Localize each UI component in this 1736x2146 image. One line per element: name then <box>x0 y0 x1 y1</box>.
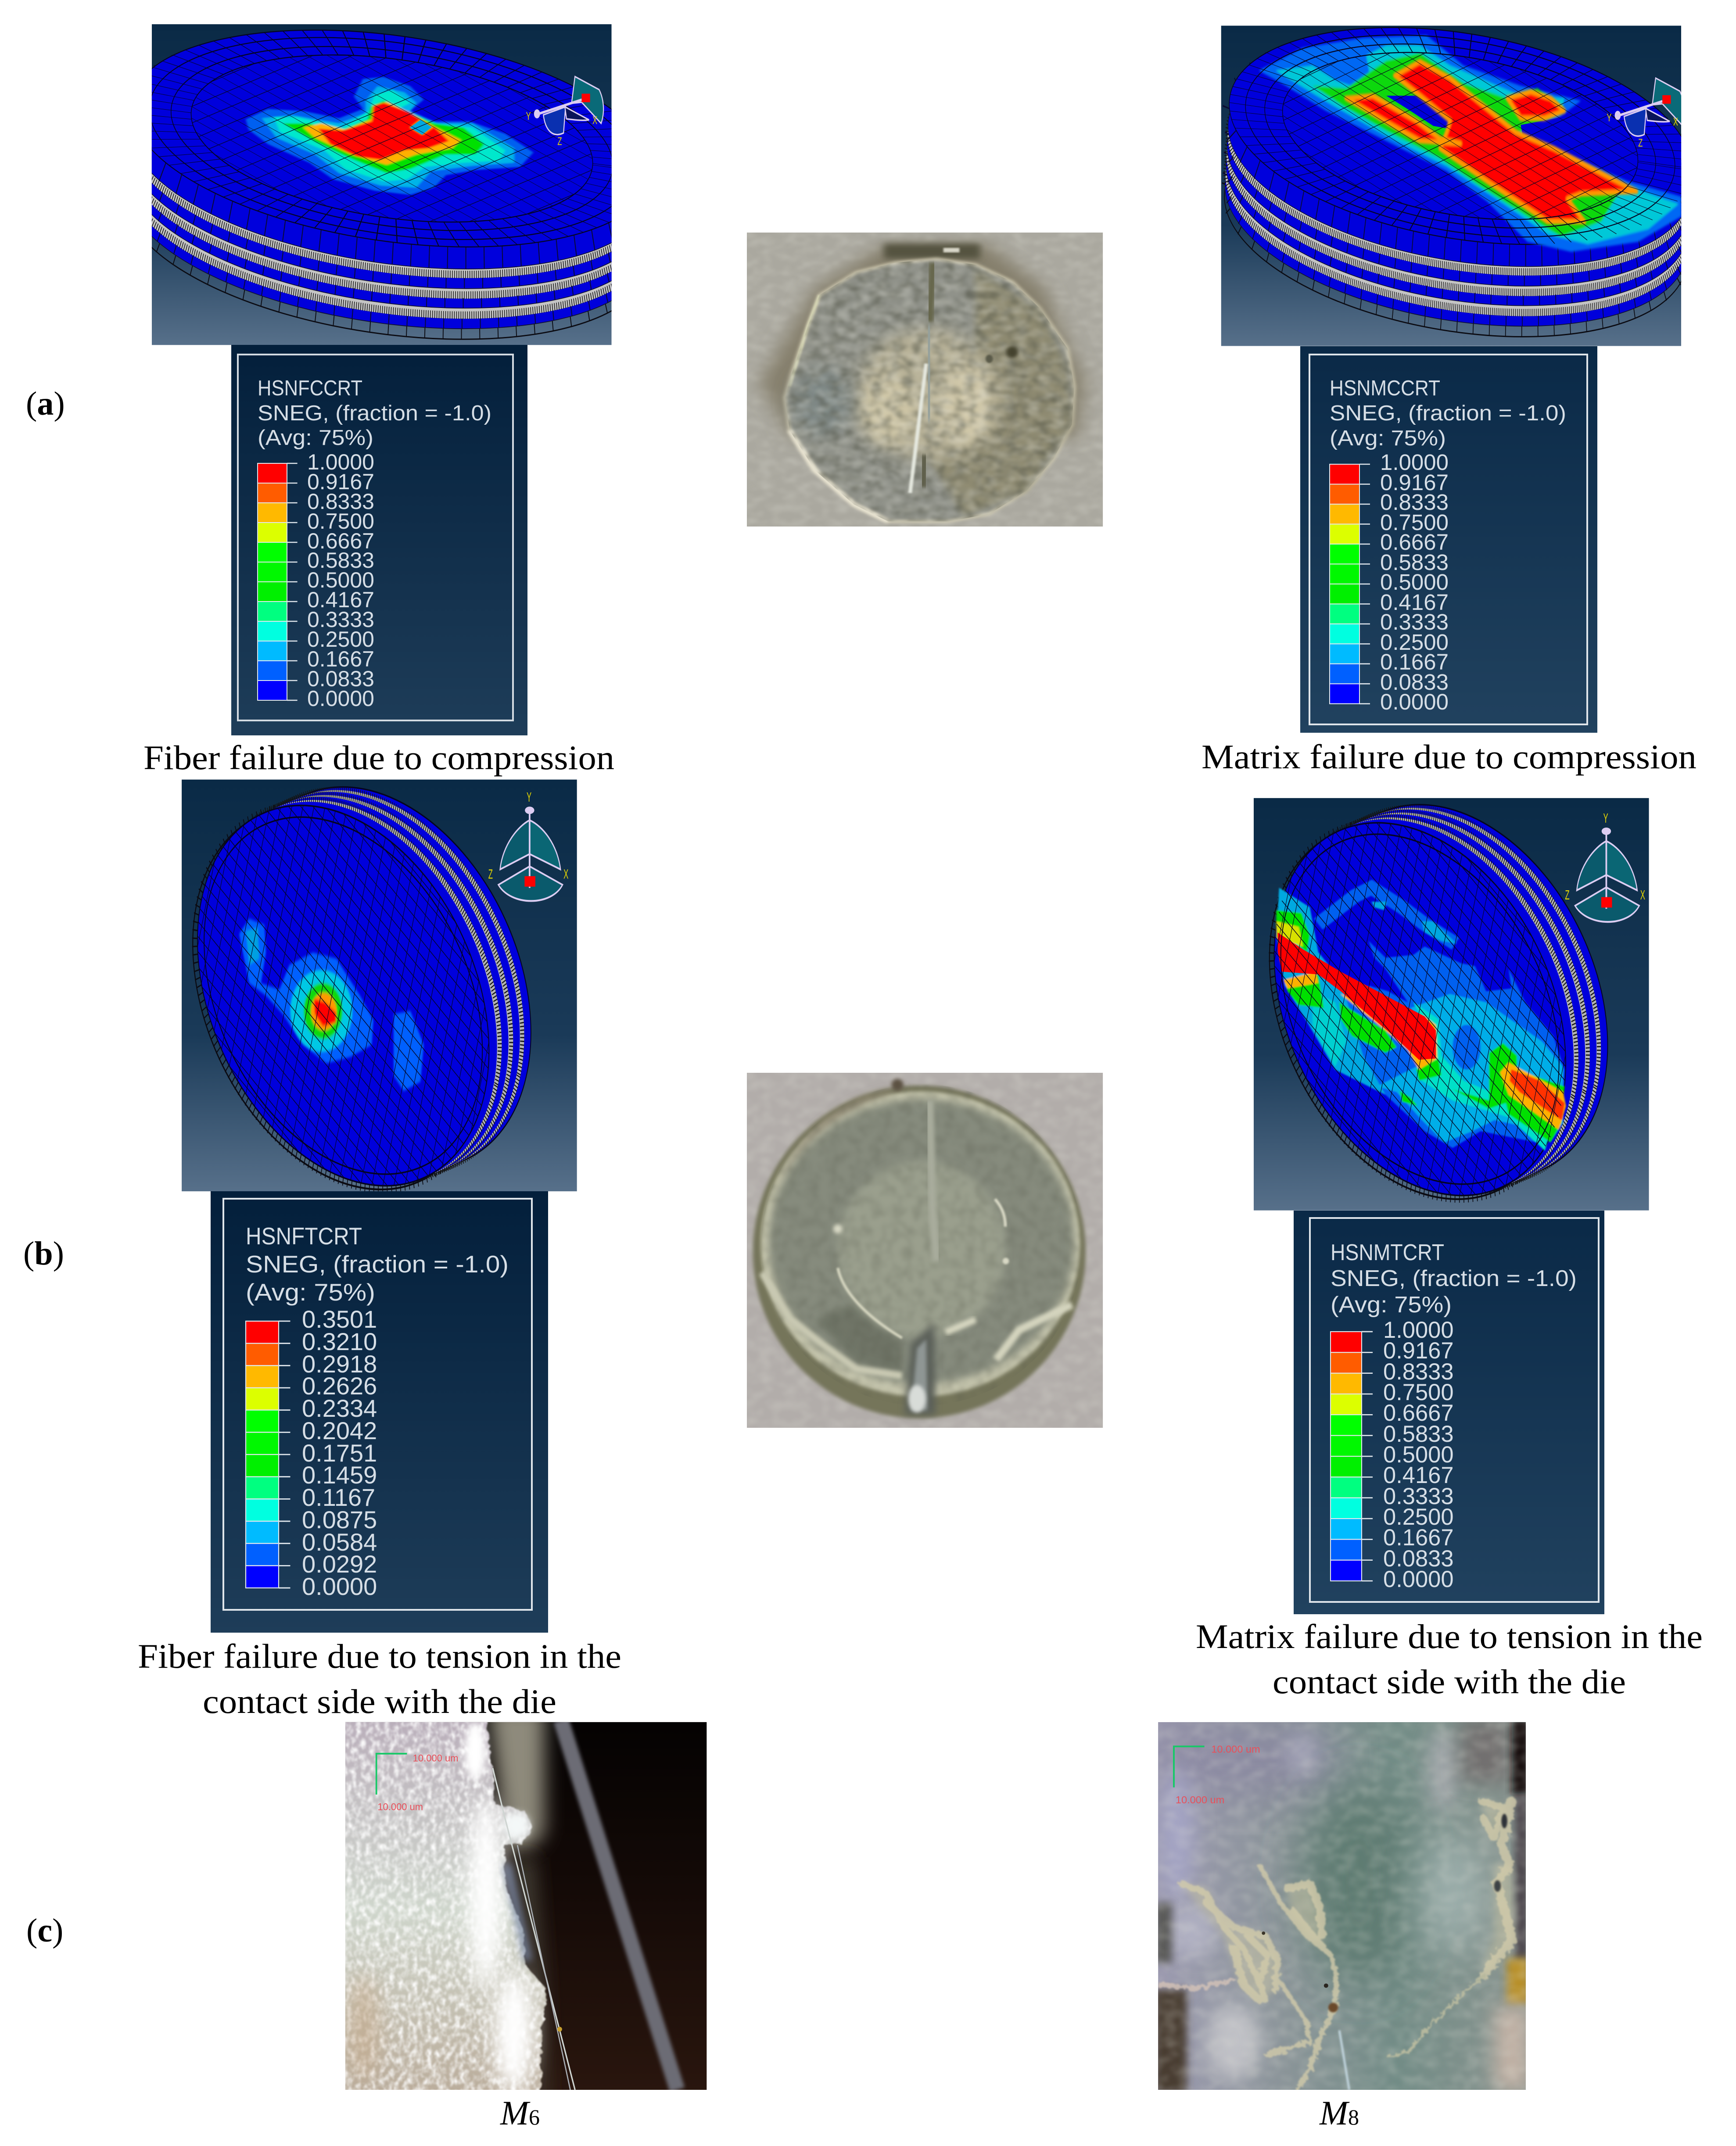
panel: legend HSNMCCRT: 0.7500 <box>1380 510 1449 535</box>
panel: legend HSNFCCRT: HSNFCCRT <box>258 376 362 400</box>
panel: legend HSNMCCRT: 0.5833 <box>1380 550 1449 575</box>
panel: legend HSNMTCRT: 0.0833 <box>1383 1546 1454 1572</box>
panel: legend HSNMTCRT: 0.7500 <box>1383 1379 1454 1405</box>
panel: legend HSNFTCRT <box>211 1191 548 1633</box>
scale bar annotation: 10.000 um <box>1211 1744 1260 1755</box>
scale bar annotation <box>377 1752 458 1813</box>
panel: legend HSNFTCRT: 0.2626 <box>302 1372 377 1400</box>
panel: legend HSNFCCRT: 0.5833 <box>307 548 374 573</box>
photo: specimen after tension <box>746 1071 1106 1430</box>
caption: M6: M6 <box>500 2094 540 2132</box>
panel: legend HSNMTCRT <box>1294 1211 1604 1614</box>
panel: legend HSNMCCRT: 0.5000 <box>1380 570 1449 595</box>
caption: matrix failure due to tension: contact side with the die <box>1273 1662 1626 1701</box>
photo: specimen after compression <box>746 230 1106 529</box>
heat map: fiber compression damage <box>246 77 534 195</box>
panel: legend HSNMCCRT: HSNMCCRT <box>1330 376 1440 400</box>
scale bar annotation <box>1174 1744 1260 1806</box>
icon: axis triad <box>1607 78 1684 149</box>
panel: legend HSNFTCRT: 0.0000 <box>302 1573 377 1600</box>
panel: legend HSNMTCRT: 0.4167 <box>1383 1462 1454 1488</box>
panel: legend HSNFCCRT: 0.6667 <box>307 529 374 553</box>
panel: matrix failure due to compression, contour plot <box>1219 0 1697 365</box>
panel: legend HSNFCCRT: 0.5000 <box>307 568 374 592</box>
scale bar annotation: 10.000 um <box>413 1752 458 1763</box>
icon: axis triad <box>526 76 603 148</box>
panel: legend HSNFCCRT: 0.0833 <box>307 666 374 691</box>
panel: legend HSNMTCRT: (Avg: 75%) <box>1331 1292 1452 1318</box>
panel: legend HSNMCCRT: 0.8333 <box>1380 490 1449 515</box>
icon: axis triad <box>488 790 569 901</box>
panel: legend HSNFTCRT: 0.3210 <box>302 1328 377 1355</box>
row b label: (b) <box>23 1235 64 1272</box>
caption: M8: M8 <box>1319 2094 1359 2132</box>
panel: legend HSNFTCRT: 0.2042 <box>302 1417 377 1444</box>
panel: legend HSNMCCRT: 0.2500 <box>1380 630 1449 655</box>
panel: legend HSNFTCRT: (Avg: 75%) <box>246 1279 375 1306</box>
panel: legend HSNMCCRT: 0.9167 <box>1380 470 1449 495</box>
panel: legend HSNFTCRT: 0.0584 <box>302 1528 377 1556</box>
panel: legend HSNMCCRT: 0.6667 <box>1380 530 1449 555</box>
panel: legend HSNMTCRT: 0.1667 <box>1383 1525 1454 1551</box>
panel: legend HSNMTCRT: HSNMTCRT <box>1331 1240 1444 1265</box>
panel: matrix failure due to tension, contour plot <box>1241 737 1649 1267</box>
panel: legend HSNFTCRT: 0.1751 <box>302 1439 377 1467</box>
panel: fiber failure due to compression, contour plot <box>152 24 612 345</box>
scale bar annotation: 10.000 um <box>1176 1794 1224 1806</box>
panel: legend HSNFTCRT: 0.1167 <box>302 1483 375 1511</box>
photo: micrograph M8 <box>1155 1720 1529 2093</box>
panel: legend HSNFTCRT: SNEG, (fraction = -1.0) <box>246 1250 509 1278</box>
panel: legend HSNFCCRT: 0.7500 <box>307 509 374 534</box>
icon: axis triad <box>1565 811 1645 922</box>
panel: legend HSNFCCRT: 1.0000 <box>307 450 374 474</box>
fiber strands <box>1159 1802 1512 2090</box>
panel: legend HSNFTCRT: 0.0875 <box>302 1506 377 1533</box>
panel: legend HSNMCCRT: (Avg: 75%) <box>1330 426 1446 450</box>
panel: legend HSNFTCRT: 0.0292 <box>302 1550 377 1578</box>
caption: fiber failure due to tension: contact side with the die <box>203 1682 556 1720</box>
panel: legend HSNMTCRT: 0.2500 <box>1383 1504 1454 1530</box>
heat map: matrix compression damage <box>1259 35 1681 252</box>
fiber clumps underlay <box>1182 1802 1514 2002</box>
panel: legend HSNMCCRT: 0.4167 <box>1380 590 1449 615</box>
panel: legend HSNFCCRT: (Avg: 75%) <box>258 426 373 450</box>
panel: legend HSNMTCRT: 0.5833 <box>1383 1421 1454 1447</box>
heat map: matrix tension damage <box>1276 888 1566 1151</box>
panel: legend HSNFCCRT: 0.1667 <box>307 647 374 671</box>
panel: legend HSNMTCRT: 0.9167 <box>1383 1338 1454 1364</box>
panel: legend HSNMCCRT: 0.0833 <box>1380 670 1449 695</box>
panel: legend HSNFCCRT <box>231 345 527 735</box>
panel: legend HSNFCCRT: 0.9167 <box>307 469 374 494</box>
caption: fiber failure due to compression: Fiber failure due to compression <box>143 738 614 777</box>
panel: legend HSNFCCRT: 0.8333 <box>307 489 374 514</box>
panel: legend HSNMCCRT <box>1300 346 1597 733</box>
panel: legend HSNFTCRT: 0.3501 <box>302 1305 377 1333</box>
panel: legend HSNFCCRT: SNEG, (fraction = -1.0) <box>258 401 491 425</box>
panel: legend HSNMCCRT: 0.0000 <box>1380 689 1449 714</box>
panel: legend HSNFCCRT: 0.0000 <box>307 686 374 711</box>
caption: matrix failure due to tension <box>1196 1617 1703 1701</box>
panel: legend HSNMTCRT: SNEG, (fraction = -1.0) <box>1331 1266 1577 1291</box>
panel: legend HSNFCCRT: 0.2500 <box>307 627 374 652</box>
panel: legend HSNFTCRT: 0.1459 <box>302 1461 377 1489</box>
row a label: (a) <box>26 385 65 422</box>
panel: legend HSNMTCRT: 0.6667 <box>1383 1400 1454 1426</box>
panel: legend HSNFCCRT: 0.4167 <box>307 588 374 612</box>
panel: legend HSNMTCRT: 0.8333 <box>1383 1359 1454 1385</box>
caption: matrix failure due to compression: Matrix failure due to compression <box>1202 738 1697 776</box>
scale bar annotation: 10.000 um <box>377 1801 423 1813</box>
panel: legend HSNFTCRT: 0.2334 <box>302 1394 377 1422</box>
caption: matrix failure due to tension: Matrix failure due to tension in the <box>1196 1617 1703 1655</box>
panel: legend HSNMTCRT: 0.0000 <box>1383 1566 1454 1592</box>
panel: legend HSNMTCRT: 0.5000 <box>1383 1442 1454 1468</box>
panel: legend HSNFCCRT: 0.3333 <box>307 607 374 632</box>
panel: legend HSNFTCRT: HSNFTCRT <box>246 1222 362 1250</box>
panel: legend HSNMCCRT: 0.1667 <box>1380 649 1449 674</box>
row c label: (c) <box>26 1912 63 1949</box>
panel: legend HSNMCCRT: 1.0000 <box>1380 450 1449 475</box>
heat map: fiber tension damage <box>239 919 424 1091</box>
caption: fiber failure due to tension: Fiber failure due to tension in the <box>138 1637 621 1675</box>
caption: fiber failure due to tension <box>138 1637 621 1720</box>
panel: legend HSNMCCRT: 0.3333 <box>1380 609 1449 634</box>
panel: legend HSNMCCRT: SNEG, (fraction = -1.0) <box>1330 401 1566 425</box>
photo: micrograph M6 <box>335 1705 711 2105</box>
panel: fiber failure due to tension, contour plot <box>164 717 577 1259</box>
panel: legend HSNMTCRT: 0.3333 <box>1383 1483 1454 1509</box>
panel: legend HSNMTCRT: 1.0000 <box>1383 1317 1454 1343</box>
panel: legend HSNFTCRT: 0.2918 <box>302 1350 377 1378</box>
